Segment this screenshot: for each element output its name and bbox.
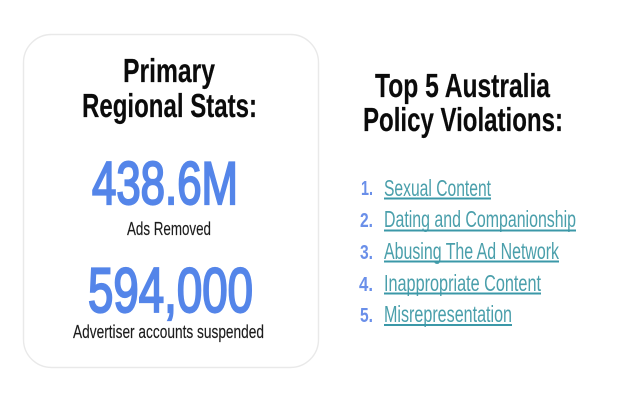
item 5 (360, 301, 512, 327)
item 4: Inappropriate Content (384, 270, 541, 296)
item 1: 1. (361, 177, 373, 200)
heading: top 5 australia policy violations: Top 5 Australia (375, 67, 550, 104)
panel: top 5 policy violations (359, 67, 576, 327)
heading: top 5 australia policy violations (363, 67, 563, 138)
stat: advertiser accounts suspended: Advertiser accounts suspended (73, 322, 264, 342)
stat: advertiser accounts suspended (73, 256, 264, 342)
card background (24, 34, 318, 368)
item 3: Abusing The Ad Network (384, 238, 559, 264)
item 1 (361, 175, 491, 201)
panel: primary regional stats (24, 34, 318, 368)
heading: primary regional stats: Regional Stats: (82, 87, 257, 124)
item 2: 2. (360, 209, 373, 232)
item 1: Sexual Content (384, 175, 491, 201)
item 4 (359, 270, 541, 296)
heading: primary regional stats: Primary (123, 52, 215, 89)
heading: primary regional stats (82, 52, 257, 124)
stat: ads removed (92, 150, 238, 239)
item 3 (360, 238, 559, 264)
item 5: 5. (360, 304, 373, 327)
stat: ads removed: Ads Removed (127, 219, 211, 239)
stat: advertiser accounts suspended: 594,000 (88, 256, 253, 326)
stat: ads removed: 438.6M (92, 150, 238, 217)
item 3: 3. (360, 241, 373, 264)
item 4: 4. (359, 273, 373, 296)
list: violations (359, 175, 576, 327)
item 5: Misrepresentation (384, 301, 512, 327)
heading: top 5 australia policy violations: Policy Violations: (363, 101, 563, 138)
